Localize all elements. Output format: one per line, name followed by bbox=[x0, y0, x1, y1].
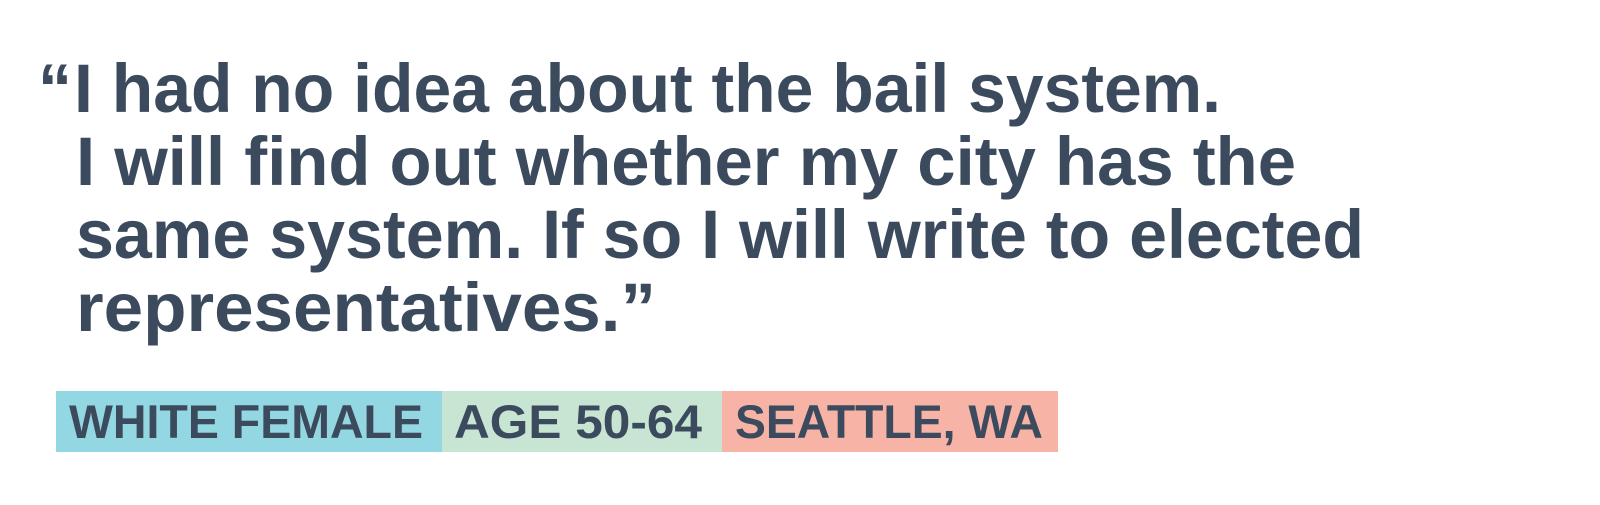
quote line 4: representatives.” bbox=[76, 269, 656, 346]
quote mark open: “ bbox=[38, 50, 72, 127]
tag: race/gender: WHITE FEMALE bbox=[69, 395, 423, 448]
quote line 1: I had no idea about the bail system. bbox=[74, 50, 1221, 127]
quote line 2: I will find out whether my city has the bbox=[76, 123, 1296, 200]
quote line 3: same system. If so I will write to elected bbox=[76, 196, 1364, 273]
tag: age: AGE 50-64 bbox=[454, 395, 702, 448]
tag row bbox=[56, 391, 1058, 452]
quote text bbox=[38, 50, 1364, 346]
tag: location: SEATTLE, WA bbox=[735, 395, 1043, 448]
